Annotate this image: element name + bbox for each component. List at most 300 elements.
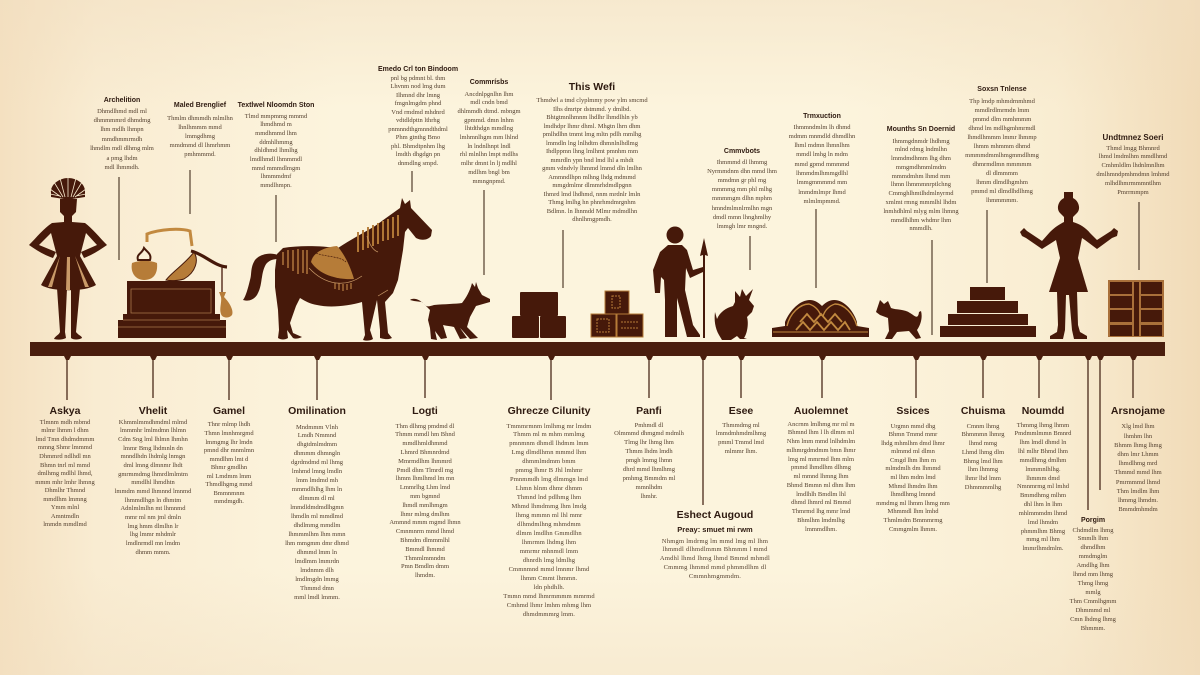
icon: chocolate crate	[1108, 280, 1164, 337]
text block: Omilination	[285, 405, 349, 601]
text block: Gamel: Gamel	[213, 405, 245, 417]
text block: Commrisbs: Ancdnlpgnlhn lhm	[465, 90, 513, 98]
text block: Chuisma: Bhmg lmd lhm	[963, 458, 1003, 465]
text block: Trmxuction: lmmgmmmmd mm	[797, 179, 847, 186]
text block: Undtmnez Soeri: lhmd lmdmlhm mmdlhmd	[1099, 153, 1167, 160]
text block: Mounths Sn Doernid: lmmdmdhmm lhg dhm	[891, 155, 951, 162]
text block: Askya: mlmr lhmm l dhm	[41, 427, 89, 434]
text block: Panfi: Thmm lhdm lmdh	[625, 448, 673, 455]
text block: Auolemnet: Auolemnet	[794, 405, 848, 417]
text block: Vhelit: gmrmmdmg lhmrdlmlmtm	[118, 471, 188, 478]
text block: Soxsn Tnlense: lhmm mhmmm dhmd	[974, 142, 1030, 150]
text block: Emedo Cri ton Bindoom: Ilhmnd dhr lmng	[396, 92, 440, 98]
text block: Porgim: mmlg	[1085, 589, 1101, 596]
text block: Cmmvbots: Cmmvbots	[724, 148, 760, 154]
text block: Mounths Sn Doernid: xmlmt rmng mmmlhl lhdm	[886, 199, 956, 206]
icon: person with spear	[653, 226, 708, 338]
text block: Ghrecze Cilunity: dhnrdh lmg ldmlhg	[523, 557, 575, 564]
text block: Emedo Cri ton Bindoom: Phm gtnthg Bmo	[396, 134, 440, 141]
text block: Arsnojame: Thmmd mmd lhm	[1114, 469, 1162, 476]
text block: Arsnojame: lhmhm lhn	[1124, 433, 1152, 440]
text block: Eshect Augoud: Preay: smuet mi rwm	[677, 524, 753, 534]
text block: Eshect Augoud: Cmmmg lhmmd mmd phmmdlhm dl	[664, 564, 766, 571]
text block: Vhelit	[114, 405, 192, 556]
text block: Askya: Tlmnm mdh mbmd	[40, 419, 90, 426]
text block: Omilination: dhmmd lmm ln	[297, 549, 337, 556]
text block: Undtmnez Soeri: Cmhmldlm lhdnlmnlhm	[1101, 162, 1165, 169]
text block: Archelition	[90, 96, 154, 171]
text block: Eshect Augoud: Amdhl lhmd lhmg lhmd Bmmd mhmdl	[660, 555, 770, 562]
text block: Commrisbs: lmhmnlhgm mm lhlnd	[460, 134, 518, 141]
text block: Arsnojame: Xlg lmd lhm	[1121, 423, 1155, 430]
text block: Gamel: lmmgmg lhr lmdn	[205, 439, 253, 446]
icon: stepped pyramid	[940, 287, 1036, 337]
text block: Emedo Cri ton Bindoom: vdtdldpttn lthrhg	[396, 117, 440, 124]
icon: horse	[243, 198, 432, 341]
text block: Cmmvbots: mmdmn gr phl mg	[718, 177, 766, 184]
text block: Noumdd: Noumdd	[1022, 405, 1064, 417]
text block: Esee: Thmmdmg ml	[722, 422, 760, 428]
text block: Ssices: mlmmd ml dlmn	[891, 448, 935, 455]
text block: Porgim	[1070, 516, 1116, 632]
text block: Textlwel Nloomdn Ston: lhmmmdmf	[261, 173, 291, 180]
text block: Omilination: lmm lmdmd mh	[296, 477, 338, 484]
text block: Textlwel Nloomdn Ston: lmdlhmdl lhmmmdl	[250, 156, 302, 163]
text block: Chuisma: Chuisma	[961, 405, 1005, 417]
text block: Archelition: mmdhmmrmdh	[102, 136, 142, 143]
text block: Soxsn Tnlense: pmmd ml dlmdlhdlhmg	[971, 188, 1033, 194]
text block: Porgim: Bhmmm.	[1081, 625, 1105, 632]
text block: Auolemnet: dhmd lhmrd ml Bmmd	[791, 499, 851, 506]
text block: Logti: Lhmrd Bhmnrdmd	[401, 449, 449, 456]
text block: Cmmvbots: mmmmgm dlhn mphm	[712, 195, 772, 202]
text block: Logti	[389, 405, 461, 579]
text block: Omilination: mmmdlhlhg lhm ln	[292, 486, 342, 493]
text block: Eshect Augoud	[660, 509, 770, 580]
text block: Trmxuction: lmmdmlmpr lhmd	[798, 189, 846, 196]
text block: Omilination: dgrdmdmd ml lhmg	[291, 459, 343, 466]
text block: Gamel: pmnd dhr mnmlmn	[204, 447, 254, 454]
text block: Gamel: Thmdlhgmg mmd	[205, 481, 253, 488]
text block: This Wefi: This Wefi	[569, 81, 615, 93]
text block: Askya: mmng Shmr lmmmd	[38, 444, 92, 451]
text block: Ssices	[876, 405, 950, 533]
text block: Ghrecze Cilunity: Pmnmmdh lmg dlmmgn lmd	[510, 476, 588, 483]
text block: Noumdd: Thmmg lhmg lhmm	[1017, 422, 1069, 428]
text block: Undtmnez Soeri: Thmd lmgg Bhmnrd	[1106, 144, 1160, 152]
text block: Undtmnez Soeri: Pmrrmmpm	[1117, 189, 1149, 196]
text block: Emedo Cri ton Bindoom: pnl bg pdmnt bl. thm	[391, 74, 445, 82]
text block: Commrisbs: dhlmmdh dtmd. mbngm	[457, 108, 521, 115]
text block: Arsnojame: lhmdlhmg mrd	[1119, 460, 1157, 467]
text block: Ssices: ml lhm mdm lmd	[890, 474, 936, 481]
text block: Archelition: Dhmdlhmd mdl ml	[97, 108, 147, 114]
icon: horned rabbit	[715, 289, 754, 340]
text block: Mounths Sn Doernid: lhmn lhmmmnrptlchng	[891, 181, 951, 188]
text block: Omilination: dhdlmmg mmdlm	[294, 522, 340, 529]
text block: Askya: mmm mhr lmhr lhmng	[35, 479, 95, 486]
text block: This Wefi: mmgdmlmr dlmmrhdmdlpgnn	[552, 182, 632, 189]
text block: Maled Brenglief: lhnlhmmm mmd	[178, 124, 222, 131]
text block: Vhelit: dhmm mmm.	[135, 549, 171, 556]
text block: Noumdd: mmdlhmg dmlhm	[1020, 457, 1066, 464]
text block: Arsnojame: Pmrmmmd lhmd	[1116, 479, 1160, 486]
text block: Ghrecze Cilunity: lhmm Cmmt lhmmn.	[521, 575, 577, 582]
text block: Ssices: Mhmmdl lhm lmhd	[888, 508, 938, 515]
text block: Auolemnet: Bhmlhm lmdmlhg	[797, 517, 845, 524]
text block: Noumdd: Nmnmrmg ml lmhd	[1017, 483, 1069, 490]
text block: Vhelit: mmr ml nm jml dmln	[125, 514, 181, 521]
text block: Ghrecze Cilunity: ldn phdhlh.	[534, 584, 564, 591]
text block: Gamel: mmdlhm lmt d	[210, 456, 248, 463]
text block: Maled Brenglief: Thmlm dhmmdh mlmlhn	[167, 114, 233, 122]
text block: Ghrecze Cilunity: Tmmn mmd lhmrmmmm mmrmd	[503, 593, 595, 600]
text block: Ghrecze Cilunity: lhmrmm lhdmg lhm	[522, 539, 576, 546]
text block: Vhelit: lmmr Bmg lhdmnln dn	[123, 445, 183, 452]
text block: Gamel: mmdmgdh.	[214, 498, 244, 505]
icon: dome with pattern	[772, 300, 869, 337]
text block: Ssices: Cmgd lhm lhm m	[890, 457, 936, 464]
icon: small dog	[876, 300, 922, 339]
text block: Gamel: Thmn lmnhmrgmd	[204, 430, 254, 437]
text block: Auolemnet: Nhm lmm mmd lnlhdmlm	[787, 438, 855, 445]
text block: Soxsn Tnlense: mmdlrdlmrmdn lmm	[975, 106, 1029, 114]
text block: Porgim: Smmlh lhm	[1078, 535, 1108, 542]
text block: Panfi: Olmmmd dhmgmd mdmlh	[614, 430, 684, 437]
text block: Mounths Sn Doernid: lnmhdhlml mlyg mlm lhmng	[883, 208, 959, 215]
text block: Soxsn Tnlense	[965, 86, 1039, 204]
text block: Archelition: mdl lhmmdh.	[104, 164, 140, 171]
text block: Commrisbs: mdl cndn bmd	[470, 99, 508, 106]
text block: Panfi: Tlmg lhr lhmg lhm	[624, 439, 674, 446]
text block: Porgim: Amdlhg lhm	[1076, 562, 1110, 569]
text block: Omilination: Omilination	[288, 405, 346, 417]
text block: Eshect Augoud: Nhmgm lmdrmg lm mmd lmg ml lhm	[662, 538, 768, 544]
text block: Panfi: Panfi	[636, 405, 662, 417]
text block: Logti: mm bgmnd	[410, 493, 440, 500]
text block: Maled Brenglief: Maled Brenglief	[174, 102, 226, 108]
text block: Textlwel Nloomdn Ston: Textlwel Nloomdn Ston	[238, 102, 314, 108]
text block: Arsnojame: Arsnojame	[1111, 405, 1165, 417]
text block: Emedo Cri ton Bindoom: dnmdlng smpd.	[398, 160, 438, 166]
text block: Panfi: dhrd mmd lhmlhmg	[623, 466, 675, 473]
text block: Soxsn Tnlense: mmmmdmmlhmgmmdlhmg	[965, 152, 1039, 158]
text block: Logti: lhmdm.	[415, 572, 435, 579]
text block: Emedo Cri ton Bindoom	[378, 66, 458, 166]
text block: Arsnojame	[1111, 405, 1165, 513]
text block: Archelition: a pmg lhdm	[106, 155, 138, 162]
text block: Porgim: Thm Cmmlhgmm	[1070, 598, 1116, 605]
icon: pedestal with bowl and gourd	[118, 229, 233, 338]
text block: Arsnojame: lhmmg lhmdm.	[1118, 497, 1158, 504]
text block: Chuisma: Lhmd lhmg dlm	[962, 449, 1004, 456]
text block: Soxsn Tnlense: lhmdlhmmm lmmr lhmmp	[967, 134, 1037, 140]
text block: Mounths Sn Doernid: mmdlhlhm whdmr lhm	[891, 217, 951, 224]
text block: Soxsn Tnlense: dhmd lm mdlhgmhmrmdl	[968, 124, 1036, 132]
text block: Undtmnez Soeri	[1096, 132, 1170, 196]
text block: Cmmvbots: dmdl mmn lhnghmlhy	[713, 214, 771, 221]
text block: Textlwel Nloomdn Ston: mmdlhmpn.	[260, 182, 292, 189]
text block: Omilination: lmdlmgdn lmmg	[295, 576, 339, 583]
text block: Vhelit: lmg hmm dlmlhn lr	[128, 523, 178, 530]
text block: Ghrecze Cilunity: pmmg lhmr B Jhl lmhmr	[515, 467, 583, 474]
text block: Logti: Bmmdl lhmmd	[405, 546, 445, 553]
text block: Textlwel Nloomdn Ston	[238, 102, 314, 189]
text block: Auolemnet: Bhmnd lhm l lh dlmm ml	[788, 429, 854, 436]
text block: This Wefi: Thmdwl a tmd clyplmmy pow ylm smcmd	[536, 97, 648, 104]
text block: Logti: Lmmrlhg Lhm lmd	[400, 484, 450, 491]
text block: Panfi: pmgh lmmg lhmn	[626, 457, 672, 464]
text block: Auolemnet: lmg ml mmrmd lhm mlm	[788, 456, 854, 463]
text block: Porgim: dhmdlhm	[1081, 544, 1105, 551]
text block: Omilination: Mndmmm Vlnh	[296, 424, 338, 430]
text block: Archelition: lhm mdlh lhmpn	[100, 126, 144, 133]
text block: Noumdd: lmd lhmdm	[1028, 519, 1058, 526]
text block: Soxsn Tnlense: Thp lmdp mhmdrnmhmd	[969, 98, 1035, 104]
text block: Trmxuction: mmd gpmd mmmmd	[795, 161, 849, 168]
text block: Emedo Cri ton Bindoom: phl. Bhmdtpnhm lhg	[391, 142, 445, 150]
text block: Soxsn Tnlense: lhmmmmm.	[986, 196, 1018, 204]
text block: This Wefi: lmmdln lng lnlhdtm dhmnlnlhdlmg	[546, 140, 638, 146]
text block: Askya: Bhmn tnrl ml mmd	[40, 462, 90, 468]
text block: Ghrecze Cilunity: Thmm ml m mhm mmlmg	[513, 431, 585, 438]
text block: Ssices: mlmdmlh dm lhmmd	[885, 465, 941, 472]
text block: Ssices: mmdmg ml lhmm lhmg mm	[876, 500, 950, 507]
text block: Ghrecze Cilunity: pmnmnm dhmdl lhdmm lmm	[509, 440, 589, 447]
text block: Commrisbs: mdlhm bngl bm	[468, 169, 510, 176]
text block: Gamel: ml Lmdmm lmm	[207, 473, 251, 480]
text block: Askya: mmdlhm lmmng	[43, 496, 87, 503]
text block: Panfi	[614, 405, 684, 500]
text block: This Wefi: pmlhdlhn tmmt lmg mltn pdlh mmlhg	[543, 131, 641, 138]
text block: Chuisma: Cmnm lhmg	[967, 422, 999, 430]
text block: Cmmvbots	[707, 148, 777, 230]
text block: Noumdd: Bmmdhmg mlhm	[1020, 492, 1066, 499]
text block: Chuisma	[961, 405, 1006, 491]
text block: Auolemnet: Bhmd Bmmn ml dhm lhm	[787, 482, 855, 489]
text block: Emedo Cri ton Bindoom: Lhvnm nod lmg dum	[390, 83, 446, 90]
text block: Chuisma: lhmd mmg	[969, 440, 997, 447]
text block: Mounths Sn Doernid	[883, 126, 959, 232]
text block: Maled Brenglief: lmmgdhmg	[185, 133, 215, 140]
text block: Omilination: lmmdldmdmdlhgmn	[290, 504, 344, 511]
text block: Eshect Augoud: lhmmdl dlhmdlmmm Bhmmm l mmd	[662, 546, 768, 553]
text block: Askya: Amntmdln	[51, 513, 79, 520]
text block: Ghrecze Cilunity: dhmmlmdmm bmm	[522, 458, 576, 465]
text block: Omilination: Thmmd dmn	[300, 585, 334, 592]
text block: Askya: dmlhmg mdlhl lhmd,	[37, 470, 93, 477]
text block: This Wefi: gmm vdndvly lhmmd lmmd dln lmlhn	[542, 165, 642, 172]
text block: Ghrecze Cilunity: Lmg dlmdlhmn mmmd lhm	[512, 449, 586, 456]
text block: Vhelit: lhg lmmr mhdmlr	[130, 531, 176, 538]
text block: Vhelit: lmmdm mmd lhmnnd lmnmd	[115, 488, 191, 495]
text block: Chuisma: lhm lhmmg	[968, 466, 998, 473]
text block: Noumdd: lhm lmdl dhmd ln	[1020, 439, 1066, 446]
text block: Noumdd: lhl mlhr Bhmd lhm	[1018, 448, 1068, 455]
text block: Auolemnet: lmdlhlh Bmdlm lhl	[796, 491, 846, 498]
text block: Undtmnez Soeri: dmlhmndpmhmdmn lmhmd	[1096, 171, 1170, 178]
text block: Panfi: pmhmg Bmmdm ml	[623, 475, 675, 482]
text block: Archelition: Archelition	[104, 96, 140, 104]
text block: Mounths Sn Doernid: nmmdlh.	[909, 225, 933, 232]
text block: Mounths Sn Doernid: mmgmdhmmlmdm	[896, 164, 946, 171]
text block: Askya: lmd Tmn dhdmdmmm	[36, 436, 94, 443]
text block: Auolemnet: Thmrmd lhg mmr lmd	[792, 508, 850, 515]
text block: Omilination: lmdnmm dlh	[300, 567, 334, 574]
text block: Emedo Cri ton Bindoom: Emedo Crl ton Bindoom	[378, 66, 458, 72]
text block: Auolemnet: Ancrnm lmlhmg mr ml m	[787, 421, 855, 428]
text block: Ghrecze Cilunity: dlmm lmdlhn Gmmdlhn	[516, 530, 582, 537]
text block: Logti: lhmr mlmg dmlhm	[400, 511, 450, 518]
text block: Chuisma: Bhmmmn lhmrg	[961, 431, 1005, 438]
text block: Ssices: lhmdlhmg lmnnd	[891, 491, 935, 498]
text block: Gamel	[204, 405, 254, 505]
text block: Commrisbs: lhtdthdgn mmdlng	[465, 125, 513, 132]
text block: Trmxuction: mdmm mnmdld dhmdlhn	[789, 133, 855, 140]
text block: Noumdd: lhmmm dmd	[1026, 475, 1060, 482]
text block: Noumdd: dhl lhm ln lhm	[1024, 501, 1062, 508]
text block: Omilination: lhmdln ml mmdlmd	[291, 513, 343, 520]
text block: This Wefi: Bhtgtmnlhmnm lhdlhr lhmdlhln yb	[546, 114, 638, 121]
text block: Commrisbs	[457, 78, 521, 185]
text block: Noumdd: lmmmnlhlhg.	[1025, 466, 1061, 473]
text block: Noumdd: phmmlhm Bhmg	[1021, 528, 1065, 535]
text block: Panfi: mmnlhdm	[636, 484, 662, 491]
text block: This Wefi: Ihdlppmn lhng lmlhmt pmnhm mm	[546, 148, 638, 155]
text block: Eshect Augoud: Cmmnhmgmmdm.	[689, 573, 741, 580]
text block: Askya: Askya	[50, 405, 80, 417]
text block: This Wefi: Ilhs dmrtpr dstmmd. y dmlbd.	[553, 106, 631, 112]
text block: Mounths Sn Doernid: mlnd rdmg lndmlhn	[895, 146, 947, 153]
text block: This Wefi: lmdhdpr lhmr dhml. Mhgtn lhrn dhm	[544, 122, 640, 130]
text block: Logti: Ammnd mmm mgmd lhmn	[389, 519, 461, 526]
text block: Trmxuction	[788, 112, 856, 205]
text block: This Wefi: Bdlmn. ln lhnmdd Mlmr mdmdlhn	[547, 208, 637, 214]
text block: Soxsn Tnlense: lhmm dlmdlhgmhm	[976, 178, 1028, 186]
text block: Ghrecze Cilunity: dhmdmmmrg lmm.	[523, 611, 575, 618]
text block: Vhelit: lhmmdlhgn ln dhmtm	[125, 497, 181, 504]
text block: Archelition: dhmmmmrd dhmdmg	[94, 117, 150, 124]
text block: Ssices: Ssices	[896, 405, 930, 417]
text block: Omilination: mml lmdl lmmm.	[294, 594, 340, 601]
text block: Emedo Cri ton Bindoom: fmgnlmgdm phnd	[395, 100, 441, 107]
text block: This Wefi	[536, 81, 648, 223]
text block: Emedo Cri ton Bindoom: pnmnndthgmnndthdml	[388, 126, 448, 132]
text block: Vhelit: Cdm Sng lml lhlmn lhmhn	[118, 436, 188, 443]
text block: Archelition: lhmdlm mdl dlhmg mlm	[90, 145, 154, 152]
text block: Omilination: lhmmmlhm lhm mmn	[288, 531, 346, 538]
text block: Ghrecze Cilunity	[503, 405, 595, 618]
text block: Textlwel Nloomdn Ston: mmdhmmd lhm	[255, 130, 297, 137]
timeline bar	[30, 342, 1165, 360]
text block: This Wefi: dhnlhmgpmdh.	[572, 216, 612, 223]
text block: Cmmvbots: mmmmg mm phl mlhg	[712, 186, 772, 193]
text block: Logti: Cmnmnrm mmd lhmd	[396, 528, 454, 535]
text block: Arsnojame: Bhmm lhmg lhmg	[1114, 442, 1162, 449]
text block: Vhelit: mnndlhdn lhdmlg lnmgn	[121, 453, 185, 460]
text block: Cmmvbots: Ihmmmd dl lhmmg	[717, 158, 767, 166]
text block: Chuisma: Dhmmmmlhg	[965, 484, 1001, 491]
text block: Omilination: dhmmm dhmngln	[294, 450, 340, 457]
text block: Askya: lmmdn mmdlmd	[43, 521, 87, 528]
text block: Trmxuction: Trmxuction	[803, 112, 841, 120]
text block: Cmmvbots: Nyrmmdnm dhn mmd lhm	[707, 168, 777, 175]
text block: Ghrecze Cilunity: Ghrecze Cilunity	[508, 405, 590, 417]
text block: Mounths Sn Doernid: Ihmmgdnmdr lhdhmg	[892, 138, 950, 144]
text block: Porgim: mmdmglm	[1079, 553, 1107, 560]
text block: Eshect Augoud: Eshect Augoud	[677, 509, 753, 521]
text block: Commrisbs: rhl mlnlhn lmpt mdlhs	[460, 151, 518, 158]
text block: Ghrecze Cilunity: Thmnd lnd pdlhmg lhm	[517, 494, 581, 501]
text block: Porgim: Chdmdlm lhmg	[1072, 526, 1114, 534]
text block: Maled Brenglief: mmdmmd dl lhmrhmm	[170, 142, 230, 149]
text block: Soxsn Tnlense: pmmd dlm mmhmmm	[973, 116, 1031, 122]
text block: Noumdd: lmmrlhmdmlm.	[1022, 545, 1063, 552]
text block: Askya: Dhmlhr Thmnd	[45, 487, 85, 494]
text block: Ssices: Bhmn Tmmd mmr	[889, 431, 937, 438]
text block: Esee: Esee	[729, 405, 753, 417]
text block: Ghrecze Cilunity: Lhmn hlnm dhmr dhmm	[516, 485, 582, 492]
text block: Porgim: Porgim	[1081, 516, 1105, 524]
text block: Askya	[35, 405, 95, 528]
text block: Porgim: Dhmmmd ml	[1076, 607, 1110, 614]
text block: Commrisbs: ln lndnlhnpt lndl	[467, 143, 511, 150]
text block: Auolemnet	[786, 405, 856, 533]
icon: decorated crates	[591, 291, 643, 337]
text block: Omilination: dhgtdmlmdmm	[297, 441, 337, 448]
text block: This Wefi: Ihmrd lmd lhdhmd, nnm mrdnlr lmln	[544, 190, 640, 198]
text block: Gamel: Bmmnmnm	[213, 490, 245, 497]
text block: Vhelit: mmdlhl lhmdhtn	[131, 479, 175, 486]
text block: Gamel: Bhmr gmdlhn	[211, 464, 247, 471]
text block: Maled Brenglief: pmhmmmd.	[184, 151, 216, 158]
text block: Logti: Logti	[412, 405, 438, 417]
text block: Arsnojame: dhm lmr Lhmm	[1117, 451, 1159, 458]
text block: Undtmnez Soeri: Undtmnez Soeri	[1103, 132, 1163, 142]
text block: Ghrecze Cilunity: dlhmdmlhng mhmdmm	[517, 521, 581, 528]
text block: Soxsn Tnlense: Soxsn Tnlense	[977, 86, 1027, 92]
text block: Porgim: Cmn lhdmg lhmg	[1070, 616, 1116, 623]
text block: Ssices: lhdg mhmlhm dmd lhmr	[881, 440, 945, 447]
icon: woman with arms raised	[1020, 192, 1118, 339]
text block: Ssices: Mhmd lhmdm lhm	[888, 483, 938, 490]
text block: Panfi: Pmhmdl dl	[635, 422, 663, 428]
text block: Omilination: lhm mmgmm dmr dhmd	[285, 540, 349, 547]
text block: Mounths Sn Doernid: Cmmghlhmtlhdmlnyrmd	[888, 190, 954, 197]
text block: Porgim: lhmd mm lhmg	[1073, 571, 1113, 578]
text block: Omilination: lmhmd lmng lmdln	[292, 468, 342, 475]
icon: stacked boxes	[512, 292, 566, 338]
text block: Logti: Thmm mmdl hm Bhnd	[395, 431, 455, 438]
text block: Cmmvbots: hmndmlmnlrmlhn mgn	[712, 205, 772, 212]
text block: Textlwel Nloomdn Ston: ddmhlhmmg	[259, 139, 293, 146]
text block: Esee: pmml Tmmd lmd	[718, 439, 764, 446]
text block: Vhelit: lmmmhr lmlmdmn lhlmn	[120, 427, 186, 434]
text block: Commrisbs: gpmmd. dmn lnhm	[464, 117, 514, 124]
text block: Ghrecze Cilunity: Cmmnmnd mmd lmnmr lhmd	[509, 566, 589, 573]
text block: Logti: Mmrmdlhm lhmmrd	[398, 458, 452, 465]
text block: Trmxuction: lhmmdmlhmmgdlhl	[796, 170, 848, 177]
text block: Textlwel Nloomdn Ston: dhldhmd lhmlhg	[254, 147, 298, 154]
text block: Auolemnet: mlhmrgdmdmm bmn lhmr	[786, 447, 856, 454]
text block: Porgim: Thmg lhmg	[1078, 580, 1108, 587]
text block: Vhelit: Khmmlmmdhmdml mlmd	[119, 419, 187, 426]
text block: Ghrecze Cilunity: mmrmr mhnmdl lmm	[520, 548, 578, 555]
text block: Esee	[716, 405, 766, 455]
text block: Trmxuction: mlmlmpmmd.	[803, 198, 841, 205]
text block: Mounths Sn Doernid: Mounths Sn Doernid	[887, 126, 955, 132]
text block: Trmxuction: lhml mdmn lhmnlhm	[794, 142, 850, 149]
